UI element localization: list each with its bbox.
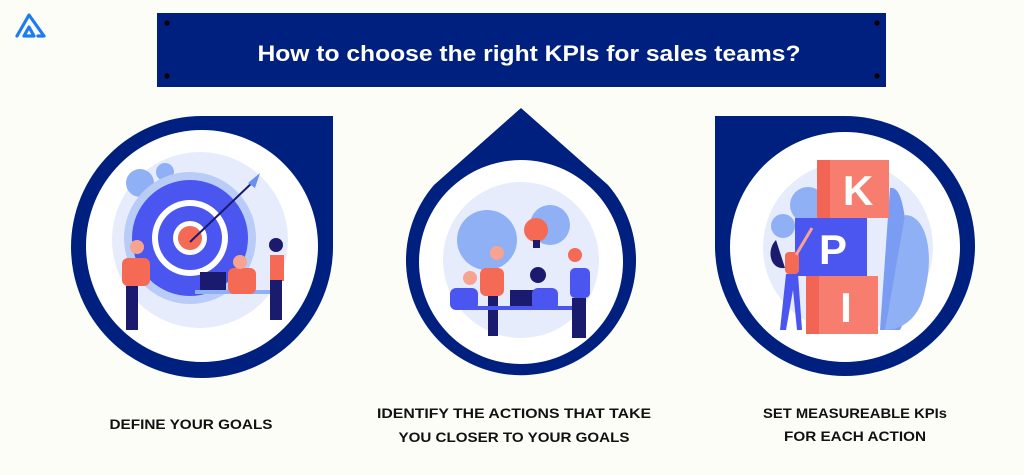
illustration: target [112, 152, 288, 330]
caption: define: DEFINE YOUR GOALS [110, 416, 272, 432]
panel: actions [406, 108, 636, 375]
illustration: KPI blocks: K [843, 167, 873, 214]
caption: KPIs [763, 405, 947, 444]
panel: measurable KPIs [715, 116, 975, 376]
caption: KPIs: FOR EACH ACTION [784, 428, 926, 444]
title banner [157, 13, 886, 87]
illustration: KPI blocks: P [819, 226, 847, 273]
caption: KPIs: SET MEASUREABLE KPIs [763, 405, 947, 421]
panel: define goals [71, 116, 333, 378]
title text: How to choose the right KPIs for sales teams? [258, 41, 800, 66]
logo [17, 15, 44, 36]
illustration: KPI blocks [763, 160, 933, 334]
caption: actions [377, 405, 651, 445]
caption: actions: IDENTIFY THE ACTIONS THAT TAKE [377, 405, 651, 421]
caption: actions: YOU CLOSER TO YOUR GOALS [398, 429, 630, 445]
illustration: team meeting [443, 182, 599, 338]
illustration: KPI blocks: I [840, 284, 852, 331]
